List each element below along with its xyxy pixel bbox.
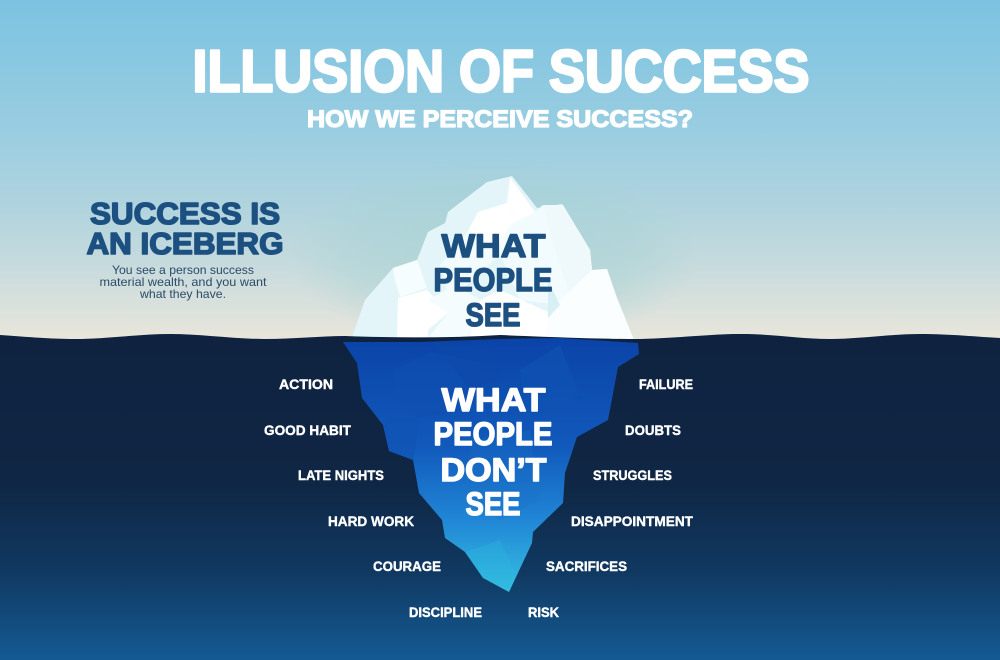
iceberg glow: [288, 160, 698, 350]
right labels: [528, 376, 693, 620]
what people see label: PEOPLE: [434, 262, 552, 298]
callout body: what they have.: [139, 287, 226, 301]
right labels: DOUBTS: [625, 422, 681, 438]
right labels: STRUGGLES: [593, 467, 672, 483]
callout: success is an iceberg: [86, 196, 284, 301]
sky background: [0, 0, 1000, 345]
what people don't see label: WHAT: [442, 382, 546, 418]
iceberg tip outline: [352, 176, 634, 340]
submerged outline: [343, 338, 639, 592]
what people don't see label: [434, 382, 552, 522]
callout body: [100, 263, 267, 301]
callout heading: AN ICEBERG: [86, 226, 284, 261]
subtitle: HOW WE PERCEIVE SUCCESS?: [307, 106, 693, 133]
what people don't see label: PEOPLE: [434, 416, 552, 452]
callout body: material wealth, and you want: [100, 275, 267, 289]
iceberg below water: [343, 338, 639, 592]
callout heading: SUCCESS IS: [90, 196, 280, 231]
left labels: HARD WORK: [328, 513, 414, 529]
title: ILLUSION OF SUCCESS: [192, 38, 810, 104]
right labels: SACRIFICES: [546, 558, 627, 574]
left labels: COURAGE: [373, 558, 441, 574]
left labels: LATE NIGHTS: [298, 467, 384, 483]
deep water: [0, 334, 1000, 660]
left labels: DISCIPLINE: [409, 604, 482, 620]
right labels: DISAPPOINTMENT: [571, 513, 693, 529]
left labels: GOOD HABIT: [264, 422, 351, 438]
callout body: You see a person success: [112, 263, 254, 277]
what people see label: WHAT: [442, 228, 546, 264]
left labels: ACTION: [279, 376, 333, 392]
what people don't see label: SEE: [466, 486, 520, 522]
left labels: [264, 376, 482, 620]
what people see label: [434, 228, 552, 333]
callout heading: [86, 196, 284, 261]
what people don't see label: DON’T: [440, 452, 547, 488]
what people see label: SEE: [466, 297, 520, 333]
right labels: RISK: [528, 604, 559, 620]
iceberg above water: [352, 176, 634, 340]
right labels: FAILURE: [639, 376, 693, 392]
